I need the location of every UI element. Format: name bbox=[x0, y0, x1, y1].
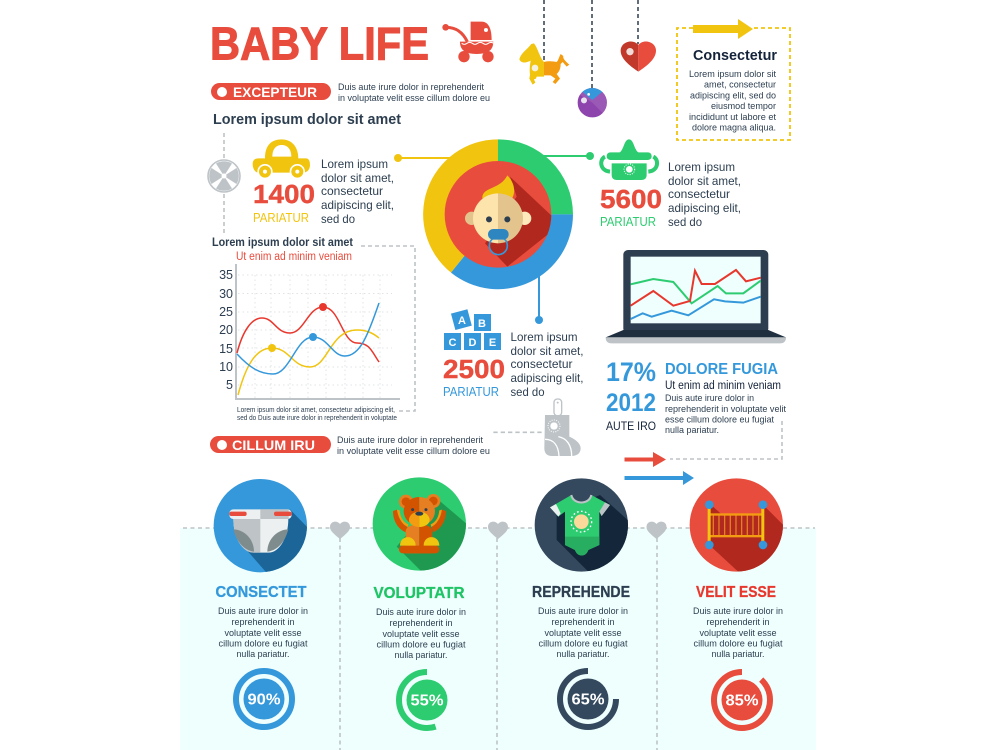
progress ring: 65%: 65% bbox=[572, 692, 605, 708]
chart caption: Lorem ipsum dolor sit amet, consectetur adipiscing elit, bbox=[237, 407, 395, 414]
column 1: consectet: CONSECTET bbox=[216, 584, 307, 601]
column 4: velit esse: voluptate velit esse bbox=[700, 628, 776, 639]
text: right stat description: dolor sit amet, bbox=[668, 174, 741, 188]
icon: crib bbox=[690, 478, 787, 573]
chart caption: sed do Duis aute irure dolor in reprehenderit in voluptate bbox=[237, 415, 397, 422]
stats: 17% and 2012: 17% bbox=[606, 357, 656, 387]
pill: excepteur bbox=[211, 83, 331, 100]
column 2: voluptatr: nulla pariatur. bbox=[394, 650, 448, 661]
text: right stat description: consectetur bbox=[668, 187, 730, 201]
chart: central ring with baby bbox=[423, 139, 573, 289]
stat: 5600 bbox=[600, 184, 662, 229]
text: excepteur description: Duis aute irure dolor in reprehenderit bbox=[338, 82, 484, 93]
progress ring: 85%: 85% bbox=[726, 692, 759, 710]
column 3: reprehende: voluptate velit esse bbox=[544, 628, 622, 639]
pill: cillum iru: CILLUM IRU bbox=[232, 437, 315, 453]
icon: laptop with line chart bbox=[606, 250, 786, 343]
text: left stat description: sed do bbox=[321, 212, 355, 226]
column 4: velit esse: reprehenderit in bbox=[706, 617, 770, 628]
callout box: consectetur: Consectetur bbox=[693, 48, 777, 64]
icon: teddy bear bbox=[373, 477, 470, 573]
heading: lorem ipsum: Lorem ipsum dolor sit amet bbox=[213, 111, 401, 128]
icon: heart bbox=[621, 41, 656, 72]
callout box: consectetur: Lorem ipsum dolor sit bbox=[689, 69, 776, 80]
text: center stat description: sed do bbox=[510, 385, 545, 399]
text: cillum description: in voluptate velit esse cillum dolore eu bbox=[337, 446, 490, 457]
column 1: consectet: reprehenderit in bbox=[232, 617, 294, 628]
progress ring: 90% bbox=[236, 671, 292, 727]
y-axis labels: 15 bbox=[219, 342, 233, 356]
y-axis labels: 20 bbox=[219, 323, 233, 337]
column 4: velit esse: cillum dolore eu fugiat bbox=[694, 638, 783, 650]
text: center stat description: Lorem ipsum bbox=[510, 330, 578, 344]
text: right stat description: sed do bbox=[668, 215, 702, 229]
y-axis labels: 5 bbox=[226, 378, 233, 392]
arrow: red bbox=[624, 452, 666, 467]
column 2: voluptatr: Duis aute irure dolor in bbox=[376, 607, 466, 618]
text: dolore fugia bbox=[665, 361, 786, 436]
column 2: voluptatr: voluptate velit esse bbox=[382, 629, 460, 640]
stat: 5600: PARIATUR bbox=[600, 214, 656, 229]
chart subheading: Ut enim ad minim veniam bbox=[236, 251, 352, 263]
text: dolore fugia: Duis aute irure dolor in bbox=[665, 393, 754, 404]
chart caption bbox=[237, 407, 397, 422]
callout box: consectetur: dolore magna aliqua. bbox=[692, 122, 776, 134]
column 2: voluptatr: reprehenderit in bbox=[390, 618, 452, 629]
panel: bottom background bbox=[180, 528, 816, 750]
text: center stat description: consectetur bbox=[510, 357, 572, 371]
stat: 5600: 5600 bbox=[600, 184, 662, 214]
progress ring: 65% bbox=[560, 671, 616, 727]
icon: rocking horse bbox=[519, 43, 569, 85]
progress ring: 55% bbox=[399, 672, 455, 728]
infographic: baby life bbox=[180, 0, 816, 750]
dashed row divider and column dividers bbox=[183, 528, 815, 750]
column 3: reprehende: Duis aute irure dolor in bbox=[538, 606, 628, 617]
column 1: consectet: cillum dolore eu fugiat bbox=[218, 638, 308, 650]
y-axis labels: 35 bbox=[219, 268, 233, 282]
stats: 17% and 2012 bbox=[606, 357, 656, 433]
icon: ball bbox=[578, 88, 607, 117]
column 3: reprehende: REPREHENDE bbox=[532, 584, 630, 601]
pill: excepteur: EXCEPTEUR bbox=[233, 84, 317, 100]
text: center stat description bbox=[510, 330, 584, 399]
text: left stat description: consectetur bbox=[321, 184, 383, 198]
text: center stat description: adipiscing elit, bbox=[510, 371, 584, 385]
icon: alphabet blocks: D bbox=[469, 337, 477, 349]
connector: blue bbox=[535, 270, 543, 324]
icon: diaper bbox=[214, 479, 307, 572]
column 2: voluptatr: cillum dolore eu fugiat bbox=[376, 640, 466, 650]
text: dolore fugia: DOLORE FUGIA bbox=[665, 361, 778, 378]
column 4: velit esse: nulla pariatur. bbox=[712, 649, 764, 660]
column 2: voluptatr: VOLUPTATR bbox=[374, 585, 464, 602]
icon: alphabet blocks bbox=[444, 309, 501, 350]
callout box: consectetur: eiusmod tempor bbox=[711, 101, 776, 112]
text: left stat description bbox=[321, 157, 394, 226]
column 3: reprehende: cillum dolore eu fugiat bbox=[538, 638, 628, 650]
chart heading: Lorem ipsum dolor sit amet bbox=[212, 237, 353, 249]
stats: 17% and 2012: AUTE IRO bbox=[606, 419, 656, 433]
text: center stat description: dolor sit amet, bbox=[510, 344, 584, 358]
column 4: velit esse: Duis aute irure dolor in bbox=[693, 606, 783, 617]
progress ring: 90%: 90% bbox=[248, 692, 281, 708]
text: right stat description bbox=[668, 160, 741, 229]
text: left stat description: adipiscing elit, bbox=[321, 198, 394, 212]
icon: gray wheel with dashed line bbox=[208, 133, 240, 233]
stat: 1400: 1400 bbox=[253, 179, 315, 209]
icon: alphabet blocks: E bbox=[489, 337, 496, 349]
stat: 2500: PARIATUR bbox=[443, 384, 499, 399]
text: right stat description: Lorem ipsum bbox=[668, 160, 735, 174]
text: cillum description: Duis aute irure dolor in reprehenderit bbox=[337, 435, 483, 446]
column 3: reprehende: reprehenderit in bbox=[552, 617, 614, 628]
callout box: consectetur: incididunt ut labore et bbox=[689, 112, 776, 123]
pill: cillum iru bbox=[210, 436, 331, 453]
stat: 1400 bbox=[253, 179, 315, 225]
y-axis labels: 10 bbox=[219, 360, 233, 374]
column 1: consectet: Duis aute irure dolor in bbox=[218, 606, 308, 617]
title: BABY LIFE bbox=[210, 18, 429, 70]
stats: 17% and 2012: 2012 bbox=[606, 389, 656, 417]
text: excepteur description bbox=[338, 82, 490, 104]
y-axis labels bbox=[219, 268, 233, 392]
text: dolore fugia: esse cillum dolore eu fugiat bbox=[665, 414, 774, 426]
text: right stat description: adipiscing elit, bbox=[668, 201, 741, 215]
icon: baby sock bbox=[493, 399, 581, 456]
icon: alphabet blocks: C bbox=[449, 337, 457, 349]
y-axis labels: 25 bbox=[219, 305, 233, 319]
column 1: consectet: voluptate velit esse bbox=[224, 628, 302, 639]
progress ring: 85% bbox=[714, 672, 770, 728]
y-axis labels: 30 bbox=[219, 287, 233, 301]
text: dolore fugia: reprehenderit in voluptate velit bbox=[665, 404, 786, 415]
column 4: velit esse bbox=[693, 584, 783, 728]
icon: hearts on divider bbox=[330, 522, 666, 539]
connector: green bbox=[540, 152, 594, 160]
hanging strings bbox=[544, 0, 638, 88]
column 1: consectet bbox=[216, 584, 308, 727]
icon: alphabet blocks: A bbox=[458, 315, 466, 327]
column 3: reprehende: nulla pariatur. bbox=[556, 649, 610, 660]
chart: line chart bbox=[212, 237, 415, 422]
callout box: consectetur: adipiscing elit, sed do bbox=[690, 90, 776, 102]
callout box: consectetur bbox=[677, 19, 790, 140]
progress ring: 55%: 55% bbox=[410, 692, 444, 710]
dashed connector to arrows bbox=[670, 421, 782, 459]
callout box: consectetur: amet, consectetur bbox=[704, 80, 776, 90]
column 3: reprehende bbox=[532, 584, 630, 727]
text: cillum description bbox=[337, 435, 490, 457]
stat: 2500 bbox=[443, 354, 505, 399]
stat: 2500: 2500 bbox=[443, 354, 505, 384]
stat: 1400: PARIATUR bbox=[253, 210, 309, 225]
icon: pram bbox=[442, 22, 494, 62]
text: dolore fugia: nulla pariatur. bbox=[665, 425, 719, 436]
icon: car bbox=[253, 139, 310, 179]
text: dolore fugia: Ut enim ad minim veniam bbox=[665, 380, 781, 392]
text: left stat description: dolor sit amet, bbox=[321, 171, 394, 185]
column 2: voluptatr bbox=[374, 585, 466, 728]
icon: onesie bbox=[535, 478, 633, 573]
arrow: blue bbox=[624, 471, 694, 485]
icon: alphabet blocks: B bbox=[478, 318, 486, 330]
text: excepteur description: in voluptate velit esse cillum dolore eu bbox=[338, 93, 490, 104]
icon: sippy cup bbox=[601, 139, 657, 180]
column 4: velit esse: VELIT ESSE bbox=[696, 584, 776, 601]
column 1: consectet: nulla pariatur. bbox=[236, 649, 290, 660]
text: left stat description: Lorem ipsum bbox=[321, 157, 388, 171]
connector: yellow bbox=[394, 154, 450, 162]
